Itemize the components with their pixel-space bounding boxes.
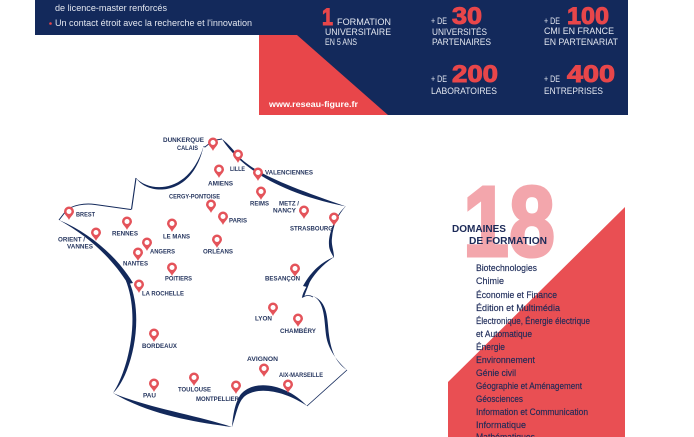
city: Lorient / Vannes: ORIENT /: [58, 236, 85, 244]
city: Rennes: [112, 216, 139, 238]
text block: list of domains: Économie et Finance: [476, 289, 557, 300]
heading: domaines de formation: DOMAINES: [452, 224, 506, 235]
city: Lorient / Vannes: VANNES: [67, 244, 94, 250]
text block: list of domains: Énergie: [476, 341, 505, 352]
city: Montpellier: MONTPELLIER: [196, 396, 239, 403]
city: Montpellier: [196, 380, 241, 403]
city: Poitiers: POITIERS: [165, 276, 193, 282]
stat: 400 entreprises: [544, 61, 615, 96]
city: Cergy-Pontoise: [169, 194, 221, 213]
city: Bordeaux: [142, 328, 178, 350]
city: Strasbourg: [290, 212, 339, 232]
stat: 30 universités: PARTENAIRES: [432, 37, 491, 47]
city: Brest: BREST: [76, 212, 95, 218]
stat: 1 formation: UNIVERSITAIRE: [325, 27, 391, 37]
panel: top navy banner: [35, 0, 628, 115]
city: Valenciennes: [253, 168, 314, 181]
city: Metz / Nancy: NANCY: [273, 208, 297, 214]
text block: list of domains: Information et Communication: [476, 406, 588, 417]
big number 18: 18: [463, 166, 555, 278]
city: Dunkerque / Calais: CALAIS: [177, 145, 199, 152]
stat: 1 formation: FORMATION: [337, 17, 391, 27]
heading: domaines de formation: DE FORMATION: [469, 236, 547, 247]
city: Avignon: AVIGNON: [247, 356, 278, 363]
city: Strasbourg: STRASBOURG: [290, 226, 333, 232]
text block: list of domains: Biotechnologies: [476, 262, 537, 273]
city: Chambéry: [280, 314, 317, 335]
city: Paris: [218, 212, 248, 225]
stat: 200 laboratoires: + DE: [431, 74, 447, 84]
city: Lorient / Vannes: [58, 228, 101, 250]
city: Reims: [250, 186, 270, 208]
text block: list of domains: Électronique, Énergie électrique: [476, 315, 590, 326]
city: Dunkerque / Calais: [163, 137, 218, 152]
city: Besançon: [265, 264, 300, 282]
stat: 100 CMI: + DE: [544, 16, 560, 26]
city: Chambéry: CHAMBÉRY: [280, 326, 317, 335]
text block: list of domains: Informatique: [476, 419, 526, 430]
text block: list of domains: [476, 262, 590, 437]
stat: 1 formation: [322, 4, 391, 47]
stat: 100 CMI: EN PARTENARIAT: [544, 37, 618, 47]
city: Orléans: ORLÉANS: [203, 246, 234, 256]
city: Brest: [64, 206, 95, 220]
stat: 100 CMI: 100: [567, 3, 609, 30]
stat: 200 laboratoires: LABORATOIRES: [431, 86, 497, 96]
city: Le Mans: LE MANS: [163, 234, 191, 240]
city: Metz / Nancy: METZ /: [279, 200, 299, 208]
stat: 400 entreprises: 400: [567, 61, 615, 88]
chart: France outline map: [59, 139, 347, 427]
city: Toulouse: [178, 372, 212, 394]
text block: list of domains: et Automatique: [476, 328, 532, 339]
stat: 30 universités: 30: [452, 3, 482, 30]
stat: 30 universités: [431, 3, 491, 47]
text block: list of domains: Édition et Multimédia: [476, 302, 561, 313]
stat: 100 CMI: [544, 3, 618, 47]
stat: 1 formation: EN 5 ANS: [325, 37, 357, 47]
city: Nantes: [123, 248, 149, 268]
city: Dunkerque / Calais: DUNKERQUE: [163, 137, 205, 144]
text block: list of domains: Chimie: [476, 275, 504, 286]
city: Lille: [230, 150, 245, 173]
city: Amiens: AMIENS: [208, 180, 234, 188]
city: Besançon: BESANÇON: [265, 276, 300, 282]
text block: list of domains: Géosciences: [476, 393, 523, 404]
city: Poitiers: [165, 262, 193, 282]
stat: 30 universités: + DE: [431, 16, 447, 26]
city: Pau: [143, 378, 159, 400]
red corner triangle: [259, 35, 388, 115]
city: Amiens: [208, 164, 234, 188]
text block: list of domains: Géographie et Aménagement: [476, 380, 582, 391]
stat: 400 entreprises: ENTREPRISES: [544, 86, 603, 96]
city: Metz / Nancy: [273, 200, 309, 219]
city: Orléans: [203, 234, 234, 256]
city: Pau: PAU: [143, 392, 156, 400]
city: Toulouse: TOULOUSE: [178, 386, 212, 394]
city: Le Mans: [163, 218, 191, 240]
stat: 200 laboratoires: [431, 61, 498, 96]
city: Lille: LILLE: [230, 166, 245, 173]
stat: 1 formation: 1: [322, 4, 333, 31]
stat: 400 entreprises: + DE: [544, 74, 560, 84]
stat: 100 CMI: CMI EN FRANCE: [544, 26, 614, 36]
city: Rennes: RENNES: [112, 230, 139, 238]
stat: 30 universités: UNIVERSITÉS: [432, 27, 487, 37]
city: Reims: REIMS: [250, 200, 270, 208]
city: Aix-Marseille: AIX-MARSEILLE: [279, 372, 324, 379]
city: Lyon: [255, 302, 278, 322]
panel: red triangle background: [448, 207, 625, 437]
text block: list of domains: Environnement: [476, 354, 535, 365]
text block: banner bullets: Un contact étroit avec la recherche et l'innovation: [55, 18, 252, 28]
city: Bordeaux: BORDEAUX: [142, 343, 178, 350]
city: Paris: PARIS: [229, 218, 248, 224]
website link: www.reseau-figure.fr: [268, 100, 358, 109]
city: Aix-Marseille: [279, 372, 324, 393]
city: Angers: [142, 238, 176, 256]
city: Lyon: LYON: [255, 316, 272, 322]
city: Avignon: [247, 356, 278, 377]
city: Valenciennes: VALENCIENNES: [265, 170, 314, 176]
city: Angers: ANGERS: [150, 248, 176, 256]
city: La Rochelle: [134, 280, 185, 298]
text block: banner bullets: [49, 3, 252, 28]
city: Nantes: NANTES: [123, 260, 149, 268]
text block: list of domains: Génie civil: [476, 367, 516, 378]
text block: banner bullets: de licence-master renforcés: [55, 3, 168, 13]
heading: domaines de formation: [452, 224, 547, 247]
city: La Rochelle: LA ROCHELLE: [142, 290, 185, 298]
city: Cergy-Pontoise: CERGY-PONTOISE: [169, 194, 221, 200]
stat: 200 laboratoires: 200: [452, 61, 498, 88]
